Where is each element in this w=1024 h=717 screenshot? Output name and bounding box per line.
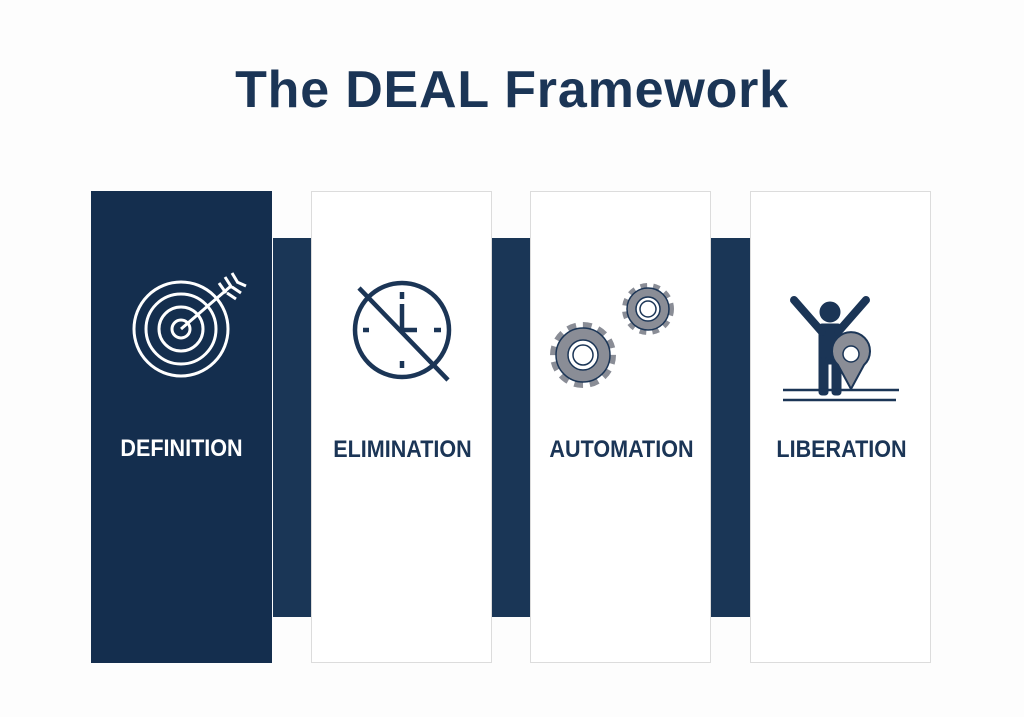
label: DEFINITION [120, 435, 243, 462]
icon: person with pin [783, 296, 899, 402]
panel: definition [91, 191, 272, 663]
label: ELIMINATION [333, 436, 472, 463]
icon: clock crossed [352, 280, 452, 382]
connector 2 [492, 238, 530, 617]
label: AUTOMATION [549, 436, 694, 463]
connector 1 [273, 238, 311, 617]
icon: gears [550, 283, 674, 388]
panel: liberation [750, 191, 931, 663]
label: LIBERATION [776, 436, 907, 463]
panel: elimination [311, 191, 492, 663]
panel: automation [530, 191, 711, 663]
title: The DEAL Framework [235, 61, 789, 119]
icon: target [132, 272, 247, 378]
connector 3 [711, 238, 750, 617]
